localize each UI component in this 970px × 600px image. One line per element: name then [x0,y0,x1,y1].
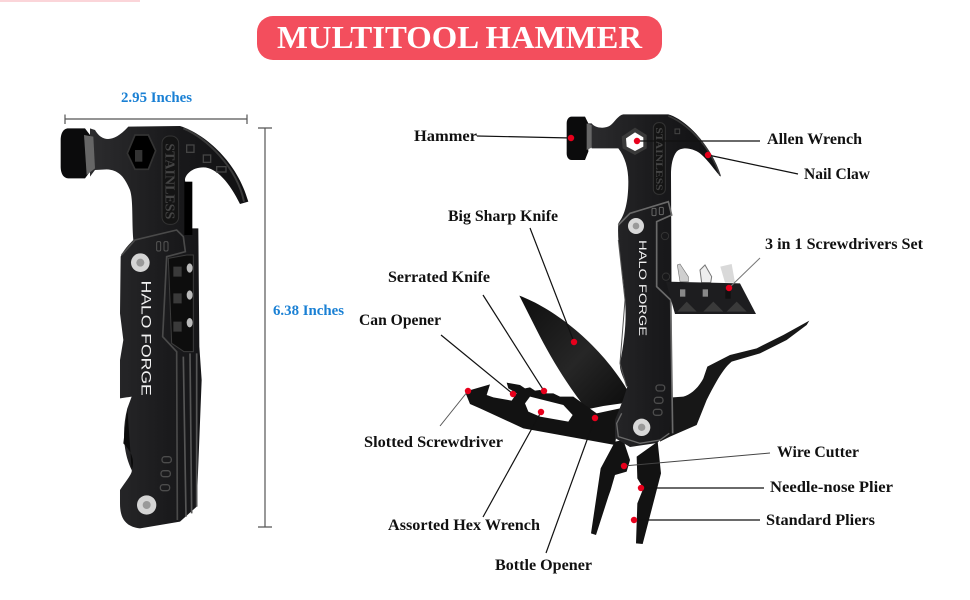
width dimension: 2.95 Inches [121,90,192,106]
callout: Hammer [414,128,574,145]
product: opened multitool with tools [465,114,809,544]
product: closed multitool hammer: HALO FORGE [139,281,154,396]
callout: Standard Pliers [631,512,875,529]
big sharp knife blade [519,296,628,409]
handle and hammer head: STAINLESS [653,127,663,191]
callout: Serrated Knife: Serrated Knife [388,269,490,286]
callout: Hammer: Hammer [414,128,477,145]
callout: Slotted Screwdriver: Slotted Screwdriver [364,434,503,451]
side lever arm [660,321,809,442]
callout: Can Opener [359,312,516,397]
height dimension [258,128,344,527]
callout: Standard Pliers: Standard Pliers [766,512,875,529]
width dimension [65,90,247,124]
callout: Assorted Hex Wrench [388,409,544,534]
height dimension: 6.38 Inches [273,303,344,319]
callout: Big Sharp Knife: Big Sharp Knife [448,208,558,225]
handle and hammer head [567,114,721,447]
callout: Serrated Knife [388,269,547,394]
callout: Bottle Opener: Bottle Opener [495,557,592,574]
callout: Big Sharp Knife [448,208,577,345]
callout: Wire Cutter: Wire Cutter [777,444,859,461]
product: closed multitool hammer [61,126,248,528]
callout: Nail Claw [705,152,870,183]
callout: Wire Cutter [621,444,859,469]
callout: Assorted Hex Wrench: Assorted Hex Wrench [388,517,540,534]
callout: Slotted Screwdriver [364,388,503,451]
title: MULTITOOL HAMMER [277,19,643,55]
wire-cutting and plier jaws [591,440,661,544]
callout: 3 in 1 Screwdrivers Set: 3 in 1 Screwdrivers Set [765,236,924,253]
callout: Can Opener: Can Opener [359,312,441,329]
callout: Needle-nose Plier: Needle-nose Plier [770,479,893,496]
callout: Needle-nose Plier [638,479,893,496]
product: closed multitool hammer: STAINLESS [163,143,178,219]
callout: Nail Claw: Nail Claw [804,166,870,183]
callout: Allen Wrench: Allen Wrench [767,131,862,148]
callout: Bottle Opener [495,415,598,574]
handle and hammer head: HALO FORGE [636,240,648,336]
callout: 3 in 1 Screwdrivers Set [726,236,924,291]
handle lower details [617,385,669,443]
multi-tool bar with can opener and hex slots [465,383,620,445]
screwdriver bit set [666,264,756,314]
callout: Allen Wrench [634,131,862,148]
